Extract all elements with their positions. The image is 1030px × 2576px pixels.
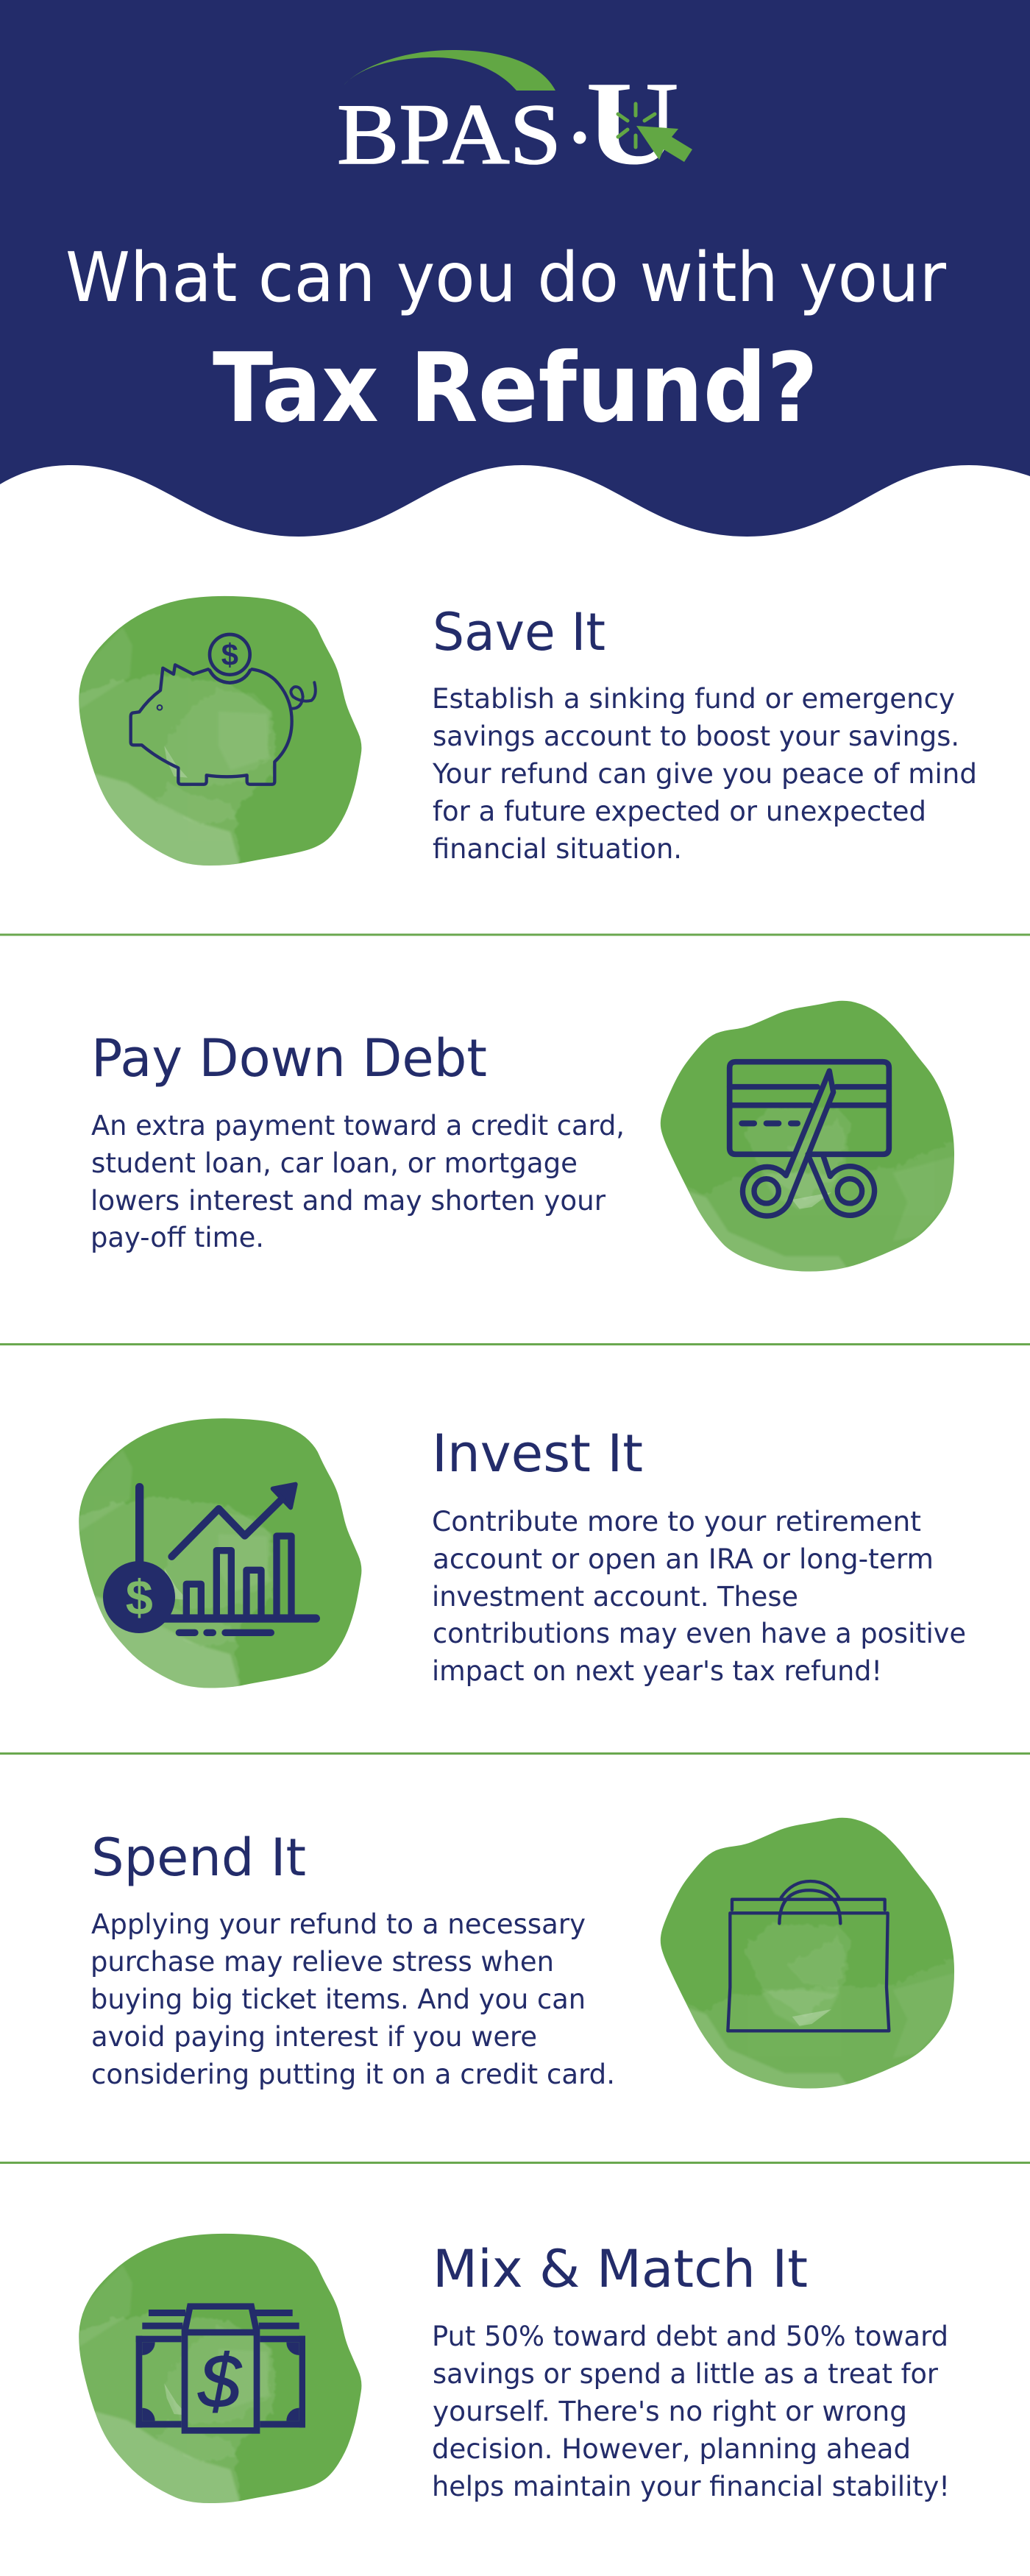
panel: mix and match it (68, 2234, 950, 2508)
heading: Invest It (432, 1423, 643, 1484)
logo: BPAS U: U (586, 57, 680, 190)
icon: rising bar chart with dollar coin on green blob (68, 1418, 361, 1694)
body text (90, 1908, 615, 2090)
body text: savings account to boost your savings. (433, 720, 959, 752)
panel: save it (68, 596, 977, 871)
body text: Your refund can give you peace of mind (432, 757, 977, 790)
body text (90, 1109, 625, 1253)
body text: buying big ticket items. And you can (90, 1983, 586, 2015)
icon: piggy bank on green blob: $ (221, 637, 238, 672)
body text: decision. However, planning ahead (432, 2432, 911, 2465)
header background (0, 0, 1030, 559)
body text: Applying your refund to a necessary (91, 1908, 586, 1940)
body text (432, 2320, 950, 2502)
body text: contributions may even have a positive (433, 1617, 966, 1649)
icon: stacked cash on green blob (68, 2234, 361, 2508)
body text: purchase may relieve stress when (90, 1945, 554, 1978)
panel: spend it (90, 1818, 959, 2100)
logo: BPAS U (337, 50, 692, 190)
body text: savings or spend a little as a treat for (433, 2357, 939, 2390)
title line 1: What can you do with your (65, 238, 947, 317)
body text (432, 682, 977, 865)
body text: investment account. These (432, 1580, 798, 1613)
icon: shopping bag on green blob (661, 1818, 959, 2100)
heading: Mix & Match It (433, 2239, 808, 2299)
body text (432, 1505, 966, 1687)
body text: considering putting it on a credit card. (91, 2058, 615, 2090)
body text: pay-off time. (90, 1221, 264, 1253)
body text: financial situation. (433, 832, 682, 865)
body text: helps maintain your financial stability! (432, 2470, 950, 2502)
body text: Put 50% toward debt and 50% toward (432, 2320, 948, 2352)
panel: pay down debt (90, 1001, 959, 1283)
body text: Establish a sinking fund or emergency (432, 682, 955, 715)
body text: An extra payment toward a credit card, (91, 1109, 625, 1142)
panel: invest it (68, 1418, 966, 1694)
wave divider (0, 465, 1030, 567)
title line 2: Tax Refund? (213, 332, 818, 444)
body text: student loan, car loan, or mortgage (91, 1147, 578, 1179)
body text: lowers interest and may shorten your (90, 1184, 606, 1217)
icon: stacked cash on green blob: $ (198, 2338, 243, 2424)
icon: piggy bank on green blob (68, 596, 361, 871)
body text: Contribute more to your retirement (432, 1505, 921, 1538)
logo: BPAS U: BPAS (337, 86, 561, 183)
body text: account or open an IRA or long-term (433, 1543, 934, 1575)
body text: for a future expected or unexpected (433, 795, 926, 827)
icon: credit card and scissors on green blob (661, 1001, 959, 1283)
body text: yourself. There's no right or wrong (433, 2395, 907, 2427)
body text: avoid paying interest if you were (91, 2020, 537, 2053)
heading: Save It (433, 602, 605, 662)
heading: Pay Down Debt (91, 1028, 487, 1089)
icon: rising bar chart with dollar coin on green blob: $ (126, 1571, 153, 1625)
heading: Spend It (91, 1827, 306, 1888)
body text: impact on next year's tax refund! (432, 1655, 882, 1687)
